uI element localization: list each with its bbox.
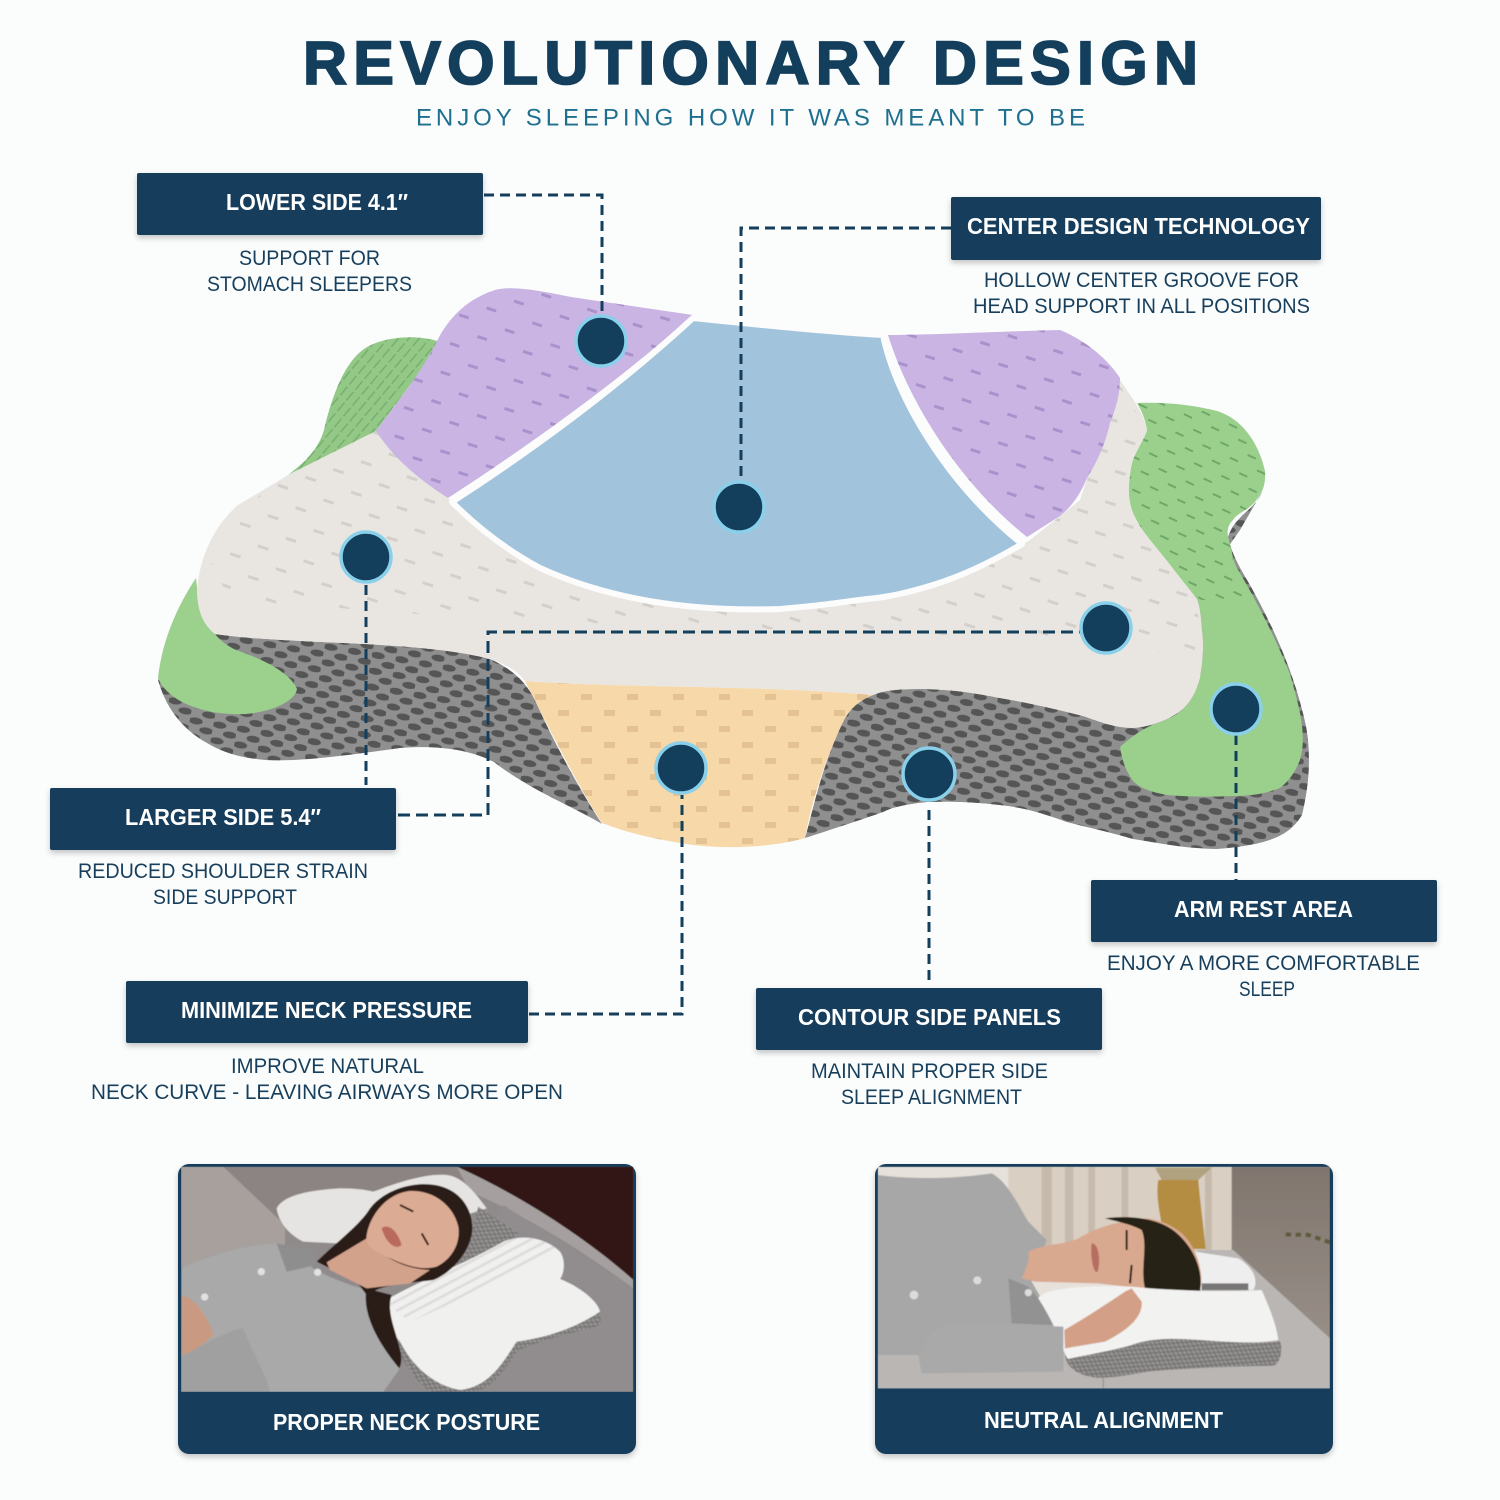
connector: center design bbox=[741, 228, 951, 481]
callout: contour side panels bbox=[756, 988, 1102, 1109]
pillow: left mesh side panel bbox=[158, 634, 602, 824]
callout: arm rest area: ARM REST AREA bbox=[1174, 896, 1353, 922]
callout: arm rest area: ENJOY A MORE COMFORTABLE bbox=[1107, 952, 1420, 975]
photo: woman on back bbox=[181, 1167, 633, 1392]
connector: lower side bbox=[484, 195, 602, 316]
photo: woman on side bbox=[878, 1167, 1330, 1389]
callout: arm rest area: SLEEP bbox=[1239, 978, 1295, 1001]
photo card: neutral alignment bbox=[875, 1164, 1333, 1454]
caption: neutral alignment: NEUTRAL ALIGNMENT bbox=[984, 1407, 1223, 1433]
pillow: left green wing bbox=[288, 337, 437, 475]
callout: minimize neck pressure bbox=[91, 981, 563, 1104]
pillow illustration bbox=[158, 288, 1309, 849]
callout: center design technology: HEAD SUPPORT IN ALL POSITIONS bbox=[973, 295, 1310, 318]
pillow: lower-left green wing bbox=[158, 578, 297, 714]
pillow: right green wing bbox=[1120, 403, 1303, 797]
callout: minimize neck pressure: MINIMIZE NECK PRESSURE bbox=[181, 997, 472, 1023]
callout: larger side: LARGER SIDE 5.4″ bbox=[125, 804, 321, 830]
pillow: right outer mesh edge bbox=[800, 492, 1309, 849]
pillow: white body bbox=[197, 380, 1203, 728]
connector: larger side up bbox=[364, 585, 368, 785]
connector: arm rest bbox=[1234, 735, 1238, 880]
callout: lower side: STOMACH SLEEPERS bbox=[207, 273, 412, 296]
marker dots bbox=[341, 316, 1261, 800]
subtitle: ENJOY SLEEPING HOW IT WAS MEANT TO BE bbox=[416, 104, 1085, 132]
connector: contour panels bbox=[928, 810, 930, 985]
caption: proper neck posture: PROPER NECK POSTURE bbox=[273, 1409, 540, 1435]
pillow: left purple zone bbox=[376, 288, 693, 498]
callout: contour side panels: MAINTAIN PROPER SIDE bbox=[811, 1060, 1048, 1083]
callout: minimize neck pressure: NECK CURVE - LEAVING AIRWAYS MORE OPEN bbox=[91, 1081, 563, 1104]
callout: arm rest area bbox=[1091, 880, 1437, 1001]
callout: lower side bbox=[137, 173, 483, 296]
connector: larger side right bbox=[398, 632, 1082, 815]
callout: center design technology: CENTER DESIGN TECHNOLOGY bbox=[967, 213, 1310, 239]
callout: lower side: SUPPORT FOR bbox=[239, 247, 380, 270]
callout: larger side bbox=[50, 788, 396, 909]
callout: lower side: LOWER SIDE 4.1″ bbox=[226, 189, 408, 215]
pillow: front orange neck zone bbox=[525, 681, 873, 847]
callout: larger side: REDUCED SHOULDER STRAIN bbox=[78, 860, 368, 883]
pillow: blue center groove bbox=[452, 318, 1022, 609]
pillow: right purple zone bbox=[888, 330, 1120, 537]
callout: minimize neck pressure: IMPROVE NATURAL bbox=[231, 1055, 424, 1078]
connector: neck pressure bbox=[529, 795, 682, 1014]
callout: center design technology: HOLLOW CENTER GROOVE FOR bbox=[984, 269, 1299, 292]
callout: larger side: SIDE SUPPORT bbox=[153, 886, 297, 909]
callout: contour side panels: CONTOUR SIDE PANELS bbox=[798, 1004, 1061, 1030]
pillow: right mesh side panel bbox=[805, 689, 1133, 839]
photo card: proper neck posture bbox=[178, 1164, 636, 1454]
callout: center design technology bbox=[951, 197, 1321, 318]
callout: contour side panels: SLEEP ALIGNMENT bbox=[841, 1086, 1022, 1109]
title: REVOLUTIONARY DESIGN bbox=[303, 29, 1198, 97]
